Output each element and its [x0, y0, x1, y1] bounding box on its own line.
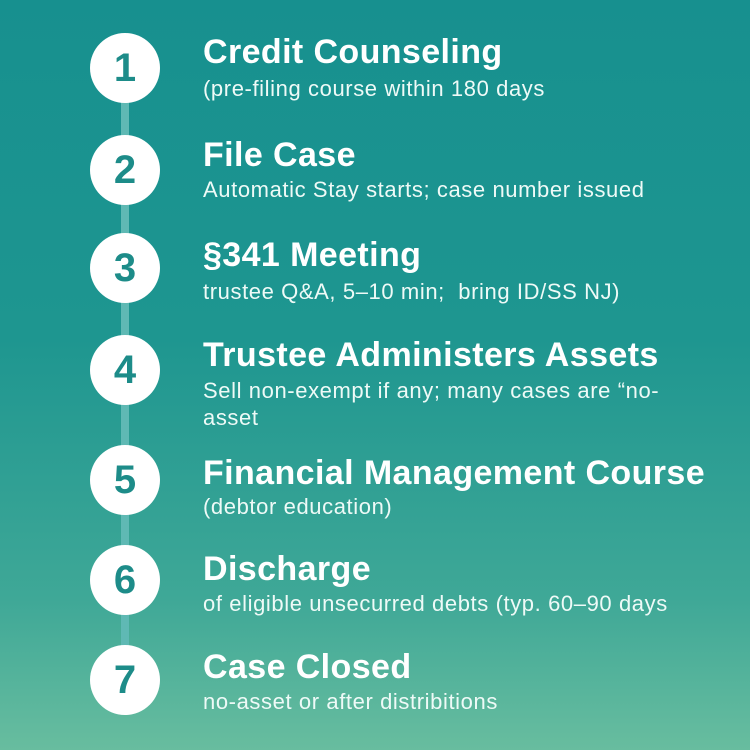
step 7 [90, 645, 498, 715]
subtitle 4: asset [203, 405, 259, 430]
circle 6: 6 [114, 558, 136, 602]
circle 5 [90, 445, 160, 515]
circle 3 [90, 233, 160, 303]
title 5: Financial Management Course [203, 454, 705, 492]
step 1 [90, 33, 545, 103]
title 4: Trustee Administers Assets [203, 336, 659, 374]
circle 2: 2 [114, 148, 136, 192]
step 4 [90, 335, 659, 430]
title 7: Case Closed [203, 648, 411, 686]
circle 3: 3 [114, 246, 136, 290]
title 1: Credit Counseling [203, 33, 503, 71]
circle 7: 7 [114, 658, 136, 702]
title 6: Discharge [203, 550, 371, 588]
title 2: File Case [203, 136, 356, 174]
circle 7 [90, 645, 160, 715]
subtitle 4: Sell non-exempt if any; many cases are “no- [203, 378, 659, 403]
title 3: §341 Meeting [203, 236, 421, 274]
step 6 [90, 545, 668, 616]
circle 4 [90, 335, 160, 405]
step 5 [90, 445, 705, 519]
subtitle 1: (pre-filing course within 180 days [203, 76, 545, 101]
circle 6 [90, 545, 160, 615]
subtitle 2: Automatic Stay starts; case number issued [203, 177, 645, 202]
step 3 [90, 233, 620, 304]
circle 2 [90, 135, 160, 205]
subtitle 3: trustee Q&A, 5–10 min; bring ID/SS NJ) [203, 279, 620, 304]
circle 1 [90, 33, 160, 103]
subtitle 6: of eligible unsecurred debts (typ. 60–90 days [203, 591, 668, 616]
subtitle 5: (debtor education) [203, 494, 392, 519]
circle 4: 4 [114, 348, 136, 392]
subtitle 4 [203, 378, 659, 430]
circle 5: 5 [114, 458, 136, 502]
subtitle 7: no-asset or after distribitions [203, 689, 498, 714]
circle 1: 1 [114, 46, 136, 90]
step 2 [90, 135, 645, 205]
